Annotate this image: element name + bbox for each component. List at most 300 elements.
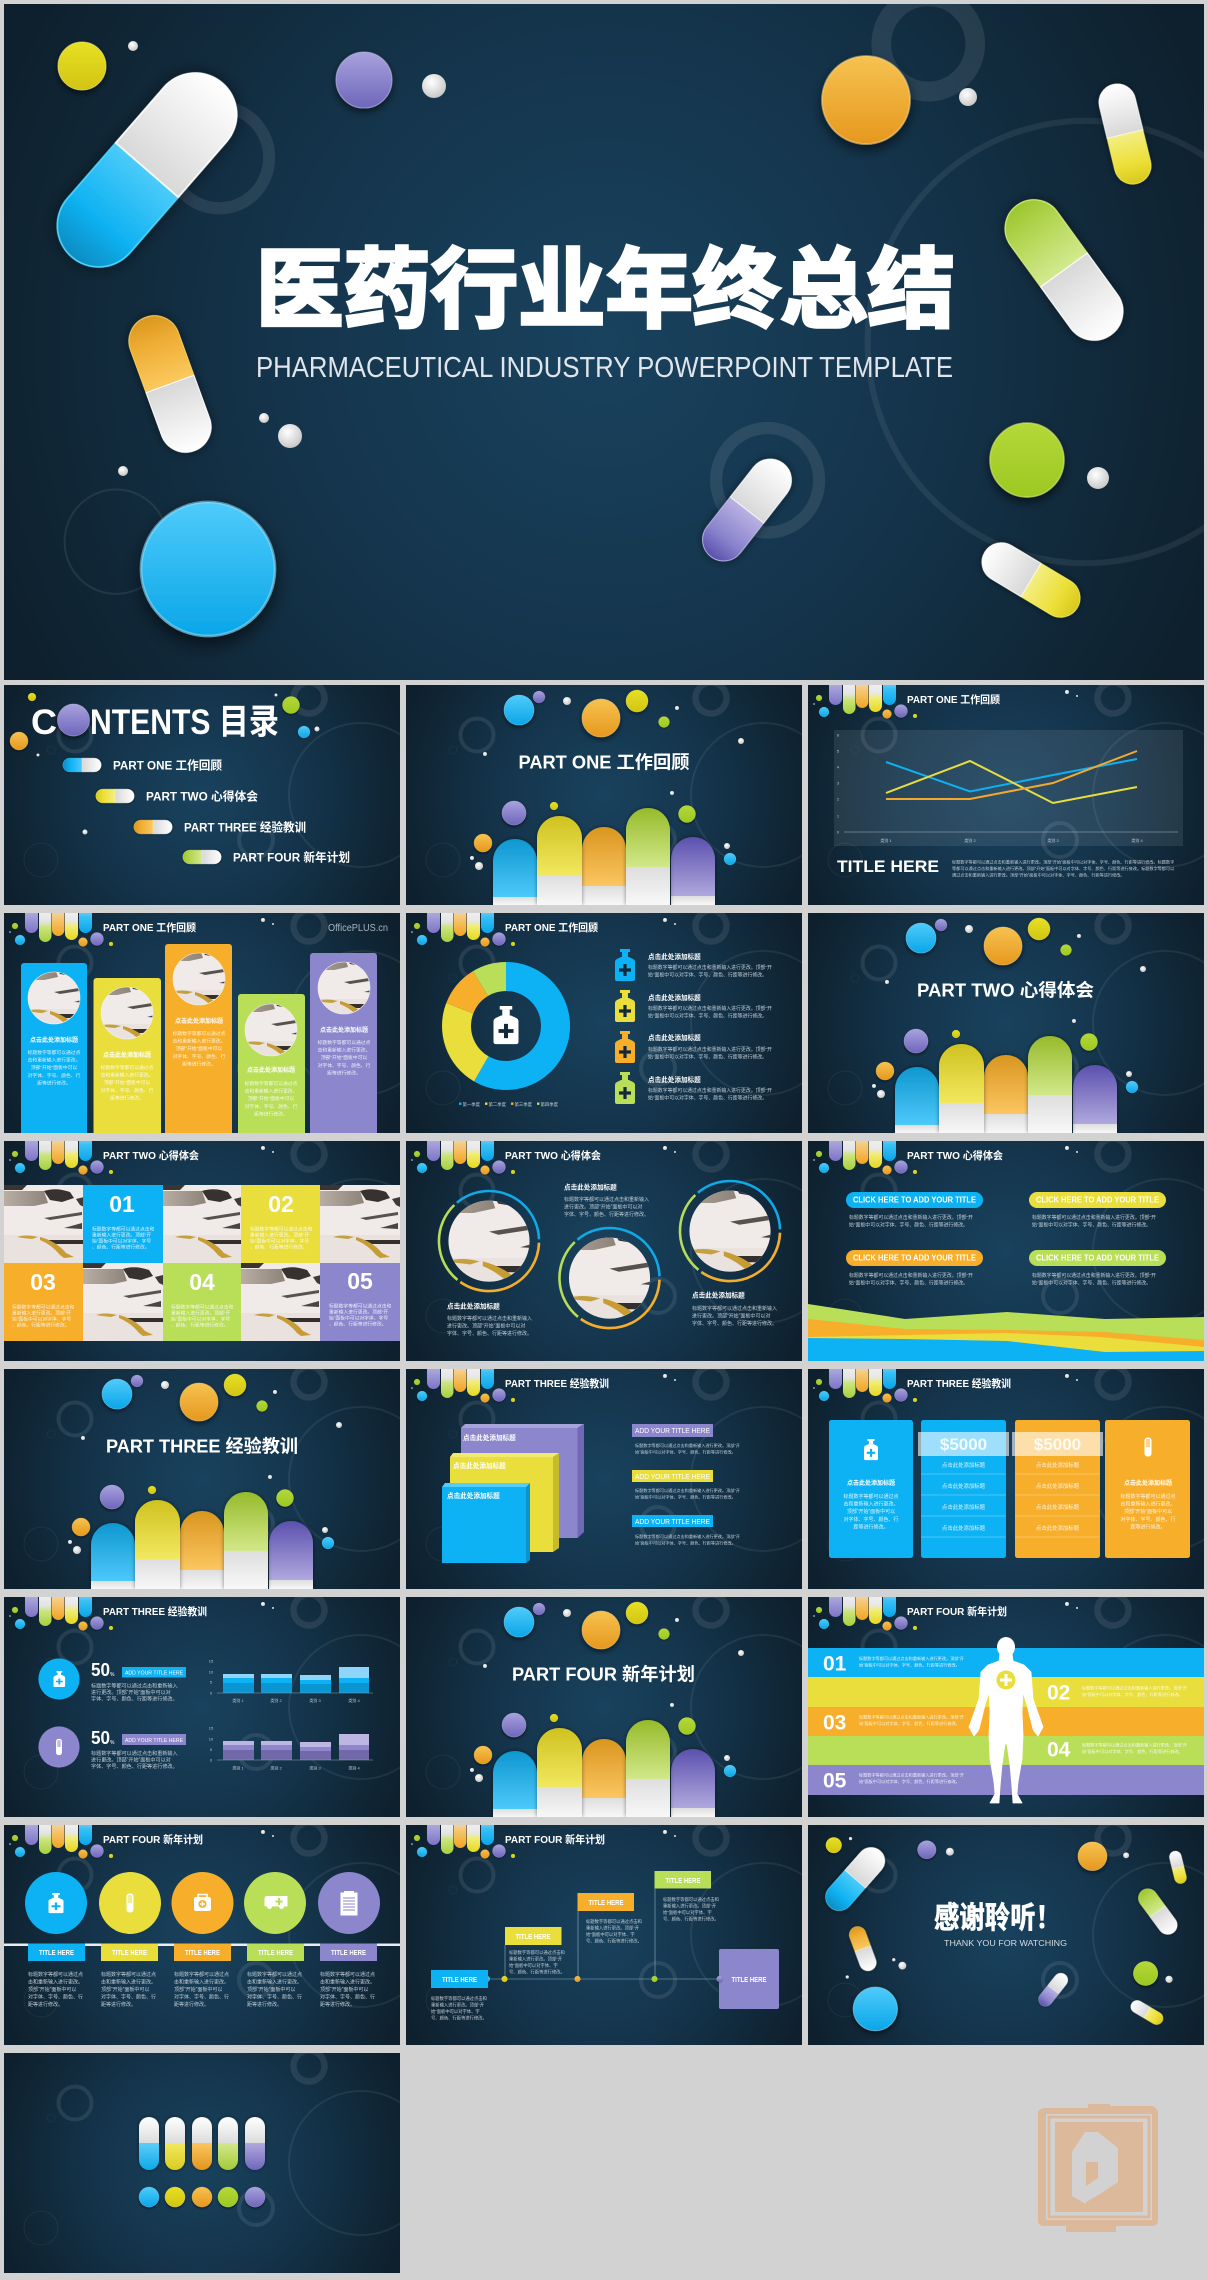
column: clipboard — [318, 1872, 380, 2008]
tile 02: 始”面板中可以对字体、字号 — [250, 1238, 309, 1244]
brand text: OfficePLUS.cn — [328, 923, 388, 934]
tile 02: 、颜色、行距等进行修改。 — [250, 1244, 308, 1250]
tile 05: 05 — [347, 1268, 373, 1294]
item: yellow label — [632, 1470, 740, 1500]
card: green: 顶部“开始”面板中可以 — [248, 1095, 294, 1102]
chart 2: purple stacked bars: 类别 2 — [270, 1764, 282, 1770]
box: blue — [442, 1483, 530, 1563]
text block 1: 点击此处添加标题 — [447, 1302, 500, 1310]
column: medical kit: TITLE HERE — [185, 1948, 220, 1957]
icon: bottle — [494, 1006, 518, 1044]
column: bottle: 标题数字等都可以通过点 — [28, 1971, 83, 1978]
item: blue button: 标题数字等都可以通过点击和重新输入进行更改。顶部“开 — [849, 1214, 973, 1221]
legend: 第二季度 — [488, 1101, 507, 1108]
column: test tube: TITLE HERE — [112, 1948, 147, 1957]
tile 01 — [83, 1185, 163, 1263]
panel: staggered photo cards slide — [4, 913, 400, 1133]
step: blue: 号、颜色、行距等进行修改。 — [431, 2014, 487, 2022]
column: medical kit: 击和重新输入进行更改。 — [174, 1979, 229, 1986]
text block 1 — [447, 1302, 532, 1337]
item: blue label: 标题数字等都可以通过点击和重新输入进行更改。顶部“开 — [635, 1533, 740, 1539]
card: orange info: 标题数字等都可以通过点 — [1120, 1493, 1176, 1500]
card: orange — [159, 940, 239, 1138]
heading: PART FOUR 新年计划 — [103, 1833, 203, 1846]
card: orange: 距等进行修改。 — [182, 1060, 216, 1067]
card: green — [231, 991, 311, 1138]
card: yellow: 对字体、字号、颜色、行 — [101, 1087, 154, 1094]
divider line — [4, 1944, 400, 1946]
item: blue button: CLICK HERE TO ADD YOUR TITLE — [853, 1196, 977, 1204]
card: blue price: $5000 — [940, 1435, 987, 1454]
header decoration — [411, 901, 676, 946]
tile 05 — [320, 1263, 400, 1341]
panel: human body bands slide — [808, 1585, 1208, 1817]
card: blue — [14, 959, 94, 1138]
heading: PART THREE 经验教训 — [505, 1377, 609, 1390]
panel: section divider part two — [808, 910, 1208, 1133]
item: orange button: 始”面板中可以对字体、字号、颜色、行距等进行修改。 — [849, 1280, 968, 1286]
card: blue info: 标题数字等都可以通过点 — [843, 1493, 899, 1500]
card: yellow: 标题数字等都可以通过点 — [101, 1064, 154, 1071]
stat 1: 进行更改。顶部“开始”面板中可以对 — [91, 1689, 171, 1696]
item: green button: CLICK HERE TO ADD YOUR TITLE — [1036, 1254, 1160, 1262]
photo tiles — [4, 1185, 400, 1341]
column: bottle: 对字体、字号、颜色、行 — [28, 1994, 83, 2000]
panel: buttons and waves slide — [808, 1129, 1208, 1361]
heading: PART THREE 经验教训 — [106, 1436, 298, 1456]
stat 1: 标题数字等都可以通过点击和重新输入 — [91, 1682, 178, 1690]
card: green: 对字体、字号、颜色、行 — [245, 1103, 298, 1110]
column: medical kit — [172, 1872, 234, 2008]
text block 1: 字体、字号、颜色、行距等进行修改。 — [447, 1330, 532, 1337]
card: orange price: 点击此处添加标题 — [1036, 1524, 1080, 1532]
illustration: arches and balls — [68, 1374, 342, 1589]
item 2: 始”面板中可以对字体、字号、颜色、行距等进行修改。 — [648, 1013, 767, 1020]
heading: PART ONE 工作回顾 — [505, 921, 598, 934]
step: yellow: 标题数字等都可以通过点击和 — [509, 1949, 565, 1956]
heading: contents: C — [31, 703, 57, 742]
tile 02: 02 — [268, 1191, 294, 1217]
panel: five circles slide — [4, 1813, 433, 2045]
item: blue label — [632, 1515, 740, 1546]
text block 3: 点击此处添加标题 — [692, 1290, 745, 1300]
watermark stamp — [1038, 2104, 1158, 2232]
card: orange: 对字体、字号、颜色、行 — [173, 1053, 226, 1060]
item 4 — [615, 1072, 772, 1104]
tile 04: 、颜色、行距等进行修改。 — [171, 1322, 229, 1328]
box: blue: 点击此处添加标题 — [447, 1491, 500, 1500]
panel: numbered tile grid slide — [4, 1129, 433, 1361]
item: green button: 始”面板中可以对字体、字号、颜色、行距等进行修改。 — [1032, 1280, 1151, 1286]
card: blue info: 距等进行修改。 — [853, 1523, 889, 1530]
item 02: 02 — [1047, 1682, 1070, 1704]
chart 2: purple stacked bars: 类别 1 — [232, 1764, 244, 1770]
item 04: 04 — [1047, 1738, 1071, 1762]
column: test tube: 对字体、字号、颜色、行 — [101, 1994, 156, 2000]
tile 01: 、颜色、行距等进行修改。 — [92, 1244, 150, 1250]
tile 03: 始”面板中可以对字体、字号 — [12, 1316, 71, 1322]
column: clipboard: 击和重新输入进行更改。 — [320, 1979, 375, 1986]
item: orange button — [846, 1250, 983, 1286]
item 03: 始”面板中可以对字体、字号、颜色、行距等进行修改。 — [859, 1720, 960, 1726]
item 03: 标题数字等都可以通过点击和重新输入进行更改。顶部“开 — [859, 1714, 964, 1720]
line chart: 0 — [837, 830, 840, 834]
column: bottle: 距等进行修改。 — [28, 2001, 63, 2008]
chart 2: purple stacked bars: 5 — [210, 1747, 213, 1752]
item 4: 始”面板中可以对字体、字号、颜色、行距等进行修改。 — [648, 1095, 767, 1102]
card: blue: 点击此处添加标题 — [30, 1036, 78, 1044]
panel: pricing cards slide — [808, 1357, 1208, 1589]
tile 03: 、颜色、行距等进行修改。 — [12, 1322, 70, 1328]
wave bands — [808, 1304, 1204, 1361]
body text: 等都可以通过点击和重新输入进行更改。顶部“开始”面板中可以对字体、字号、颜色、行距等进行修改。标题数字等都可以 — [952, 865, 1174, 871]
step: orange: 始”面板中可以对字体、字 — [586, 1931, 635, 1938]
step: green: 重新输入进行更改。顶部“开 — [663, 1902, 717, 1910]
chart 2: purple stacked bars: 类别 4 — [348, 1764, 360, 1770]
item 02: 标题数字等都可以通过点击和重新输入进行更改。顶部“开 — [1082, 1684, 1187, 1690]
chart 1: blue stacked bars: 15 — [209, 1658, 214, 1664]
card: blue info: 顶部“开始”面板中可以 — [847, 1508, 895, 1515]
contents item 2: PART TWO 心得体会 — [146, 788, 258, 804]
stat 1: % — [110, 1672, 115, 1678]
item 4: 标题数字等都可以通过点击和重新输入进行更改。顶部“开 — [648, 1087, 772, 1094]
step: yellow — [505, 1927, 565, 1976]
header decoration — [813, 1585, 1078, 1630]
text block 2: 进行更改。顶部“开始”面板中可以对 — [564, 1204, 642, 1210]
decorative balls — [10, 693, 320, 834]
chart 1: blue stacked bars: 0 — [210, 1690, 213, 1696]
panel: section divider part four — [406, 1594, 835, 1817]
chart 1: blue stacked bars: 类别 2 — [270, 1697, 282, 1703]
step: orange: 号、颜色、行距等进行修改。 — [586, 1938, 642, 1944]
panel: stacked bars slide — [4, 1585, 433, 1817]
card: orange: 顶部“开始”面板中可以 — [176, 1045, 222, 1052]
header decoration — [813, 1129, 1078, 1174]
item 1: 始”面板中可以对字体、字号、颜色、行距等进行修改。 — [648, 972, 767, 979]
legend: 第三季度 — [514, 1101, 533, 1108]
item: yellow button: 标题数字等都可以通过点击和重新输入进行更改。顶部“开 — [1032, 1214, 1156, 1221]
item: blue button: 始”面板中可以对字体、字号、颜色、行距等进行修改。 — [849, 1222, 968, 1228]
step: orange: 标题数字等都可以通过点击和 — [586, 1918, 642, 1925]
step: green: 号、颜色、行距等进行修改。 — [663, 1916, 719, 1922]
panel: donut chart slide — [406, 901, 835, 1133]
line chart: 1 — [837, 814, 840, 818]
column: ambulance: 顶部“开始”面板中可以 — [247, 1986, 295, 1993]
stat 2 — [38, 1726, 186, 1770]
card: blue: 距等进行修改。 — [37, 1079, 71, 1086]
text block 3: 字体、字号、颜色、行距等进行修改。 — [692, 1320, 777, 1327]
column: ambulance — [244, 1872, 306, 2008]
illustration: floating pills and tablets — [820, 1837, 1188, 2031]
heading: PART TWO 心得体会 — [505, 1149, 601, 1162]
contents item 4 — [183, 850, 350, 864]
heading: contents: NTENTS 目录 — [90, 703, 279, 742]
card: purple: 顶部“开始”面板中可以 — [321, 1054, 367, 1061]
palette balls — [139, 2187, 265, 2207]
tile 02 — [241, 1185, 320, 1263]
tile 05: 始”面板中可以对字体、字号 — [329, 1314, 388, 1322]
item: purple label: ADD YOUR TITLE HERE — [635, 1426, 710, 1435]
text block 3 — [692, 1290, 777, 1327]
card: yellow: 顶部“开始”面板中可以 — [104, 1079, 150, 1086]
card: orange info: 点击此处添加标题 — [1124, 1479, 1172, 1487]
line chart: 4 — [837, 764, 840, 770]
timeline connectors — [488, 1888, 721, 1979]
step: orange — [578, 1893, 642, 1944]
line chart: 类别 4 — [1131, 837, 1143, 843]
header decoration — [9, 1585, 274, 1630]
chart 2: purple stacked bars — [209, 1726, 373, 1770]
colour bands — [808, 1648, 1204, 1795]
heading: PART ONE 工作回顾 — [103, 921, 196, 934]
column: test tube: 标题数字等都可以通过点 — [101, 1971, 156, 1978]
stat 1: ADD YOUR TITLE HERE — [125, 1670, 183, 1676]
column: ambulance: 标题数字等都可以通过点 — [247, 1971, 302, 1978]
item: yellow label: 标题数字等都可以通过点击和重新输入进行更改。顶部“开 — [635, 1487, 740, 1493]
stat 2: % — [110, 1740, 115, 1746]
card: orange info: 顶部“开始”面板中可以 — [1124, 1508, 1172, 1515]
panel: ring photos slide — [406, 1129, 835, 1361]
item 3: 始”面板中可以对字体、字号、颜色、行距等进行修改。 — [648, 1054, 767, 1061]
item: green button — [1029, 1250, 1166, 1286]
item 05: 05 — [823, 1770, 847, 1792]
legend: 第四季度 — [540, 1101, 559, 1108]
item: yellow button: CLICK HERE TO ADD YOUR TITLE — [1036, 1196, 1160, 1204]
item: yellow label: ADD YOUR TITLE HERE — [635, 1472, 710, 1481]
illustration: arches and balls — [470, 690, 744, 905]
card: blue info: 击和重新输入进行更改。 — [843, 1501, 899, 1508]
step: purple box: TITLE HERE — [732, 1975, 767, 1984]
chart 2: purple stacked bars: 类别 3 — [309, 1764, 321, 1770]
card: orange info: 距等进行修改。 — [1130, 1523, 1166, 1530]
tile 01: 标题数字等都可以通过点击和 — [92, 1226, 155, 1232]
column: medical kit: 对字体、字号、颜色、行 — [174, 1994, 229, 2000]
column: medical kit: 标题数字等都可以通过点 — [174, 1971, 229, 1978]
tile 03: 重新输入进行更改。顶部“开 — [12, 1310, 71, 1316]
tile 05: 、颜色、行距等进行修改。 — [329, 1320, 387, 1328]
card: green: 点击此处添加标题 — [247, 1066, 295, 1074]
card: green: 标题数字等都可以通过点 — [245, 1080, 298, 1087]
card: blue price: 点击此处添加标题 — [942, 1461, 986, 1469]
item 03: 03 — [823, 1712, 846, 1734]
column: bottle: TITLE HERE — [39, 1948, 74, 1957]
heading: PART THREE 经验教训 — [103, 1605, 207, 1618]
tile 04: 标题数字等都可以通过点击和 — [171, 1304, 234, 1310]
card: green: 距等进行修改。 — [254, 1110, 288, 1117]
step: purple box — [716, 1949, 779, 2009]
column: test tube: 顶部“开始”面板中可以 — [101, 1986, 149, 1993]
donut chart — [442, 962, 570, 1090]
step: orange: TITLE HERE — [588, 1898, 624, 1907]
card: purple: 标题数字等都可以通过点 — [318, 1039, 371, 1046]
column: ambulance: 对字体、字号、颜色、行 — [247, 1994, 302, 2000]
item 01: 标题数字等都可以通过点击和重新输入进行更改。顶部“开 — [859, 1655, 964, 1661]
header decoration — [9, 1813, 274, 1858]
subtitle: PHARMACEUTICAL INDUSTRY POWERPOINT TEMPLATE — [256, 352, 953, 384]
chart 2: purple stacked bars: 15 — [209, 1726, 214, 1730]
step: green: TITLE HERE — [666, 1876, 701, 1885]
card: purple: 击和重新输入进行更改。 — [318, 1047, 370, 1054]
text block 2: 标题数字等都可以通过点击和重新输入 — [564, 1196, 649, 1203]
tile 02: 标题数字等都可以通过点击和 — [250, 1226, 313, 1232]
column: test tube: 击和重新输入进行更改。 — [101, 1979, 156, 1986]
line chart: 5 — [837, 748, 840, 754]
illustration: arches and balls — [872, 918, 1146, 1133]
text block 1: 标题数字等都可以通过点击和重新输入 — [447, 1315, 532, 1322]
tile 04 — [163, 1263, 241, 1341]
item 04: 标题数字等都可以通过点击和重新输入进行更改。顶部“开 — [1082, 1742, 1187, 1748]
header decoration — [813, 1357, 1078, 1402]
title here: TITLE HERE — [837, 858, 939, 876]
item: green button: 标题数字等都可以通过点击和重新输入进行更改。顶部“开 — [1032, 1272, 1156, 1279]
chart 1: blue stacked bars: 10 — [209, 1670, 214, 1674]
panel: closing palette slide — [4, 2050, 433, 2273]
tile 04: 重新输入进行更改。顶部“开 — [171, 1310, 230, 1316]
stat 1: 字体、字号、颜色、行距等进行修改。 — [91, 1696, 178, 1702]
contents item 1 — [63, 758, 222, 772]
line chart: 类别 3 — [1047, 837, 1059, 843]
card: purple: 点击此处添加标题 — [320, 1026, 368, 1034]
item 3: 标题数字等都可以通过点击和重新输入进行更改。顶部“开 — [648, 1046, 772, 1053]
item 2: 点击此处添加标题 — [648, 993, 701, 1002]
step: yellow: 始”面板中可以对字体、字 — [509, 1962, 558, 1969]
heading: PART FOUR 新年计划 — [512, 1664, 695, 1684]
item 1: 点击此处添加标题 — [648, 952, 701, 961]
line chart: 6 — [837, 732, 840, 738]
column: ambulance: TITLE HERE — [258, 1948, 293, 1957]
header decoration — [9, 913, 274, 948]
card: blue: 标题数字等都可以通过点 — [28, 1049, 81, 1056]
column: clipboard: 顶部“开始”面板中可以 — [320, 1986, 368, 1993]
item: blue label: ADD YOUR TITLE HERE — [635, 1517, 710, 1526]
item 4: 点击此处添加标题 — [648, 1075, 701, 1084]
heading: PART TWO 心得体会 — [103, 1149, 199, 1162]
panel: stepped timeline slide — [406, 1813, 835, 2045]
item 05: 标题数字等都可以通过点击和重新输入进行更改。顶部“开 — [859, 1772, 964, 1778]
column: test tube — [99, 1872, 161, 2008]
tile 02: 重新输入进行更改。顶部“开 — [250, 1232, 309, 1238]
card: yellow: 点击此处添加标题 — [103, 1051, 151, 1059]
card: yellow: 距等进行修改。 — [110, 1094, 144, 1101]
item: purple label: 标题数字等都可以通过点击和重新输入进行更改。顶部“开 — [635, 1442, 740, 1448]
contents item 4: PART FOUR 新年计划 — [233, 850, 350, 864]
tile 03: 标题数字等都可以通过点击和 — [12, 1304, 75, 1310]
column: test tube: 距等进行修改。 — [101, 2001, 136, 2008]
panel: cover slide — [4, 0, 1208, 680]
body text: 标题数字等都可以通过点击和重新输入进行更改。顶部“开始”面板中可以对字体、字号、颜色、行距等进行修改。标题数字 — [952, 858, 1174, 864]
box: purple: 点击此处添加标题 — [463, 1433, 516, 1442]
item 02 — [1047, 1682, 1187, 1704]
stat 2: 进行更改。顶部“开始”面板中可以对 — [91, 1756, 171, 1764]
column: clipboard: TITLE HERE — [331, 1948, 366, 1957]
card: blue price: 点击此处添加标题 — [942, 1482, 986, 1490]
tile 03: 03 — [30, 1269, 56, 1295]
item 2: 标题数字等都可以通过点击和重新输入进行更改。顶部“开 — [648, 1005, 772, 1012]
capsule: orange — [192, 2117, 212, 2170]
header decoration — [813, 685, 1078, 720]
heading: PART TWO 心得体会 — [907, 1149, 1003, 1162]
tile 05: 重新输入进行更改。顶部“开 — [329, 1308, 388, 1316]
legend — [459, 1101, 559, 1108]
item 2 — [615, 990, 772, 1022]
panel: stacked boxes slide — [406, 1357, 835, 1589]
column: medical kit: 顶部“开始”面板中可以 — [174, 1986, 222, 1993]
card: blue: 击和重新输入进行更改。 — [28, 1057, 80, 1064]
item: yellow label: 始”面板中可以对字体、字号、颜色、行距等进行修改。 — [635, 1494, 736, 1500]
line chart: 类别 2 — [964, 837, 976, 843]
step: green: 标题数字等都可以通过点击和 — [663, 1896, 719, 1903]
item: blue button — [846, 1192, 983, 1228]
column: clipboard: 距等进行修改。 — [320, 2001, 355, 2008]
panel: section divider part three — [4, 1366, 433, 1589]
column: bottle — [25, 1872, 87, 2008]
step: blue: 重新输入进行更改。顶部“开 — [431, 2002, 485, 2008]
tile 04: 04 — [189, 1269, 215, 1295]
card: orange info: 击和重新输入进行更改。 — [1120, 1501, 1176, 1508]
step: yellow: 重新输入进行更改。顶部“开 — [509, 1956, 563, 1962]
header decoration — [411, 1129, 676, 1174]
item 3: 点击此处添加标题 — [648, 1033, 701, 1042]
chart 1: blue stacked bars: 类别 1 — [232, 1697, 244, 1703]
item 01 — [823, 1652, 964, 1676]
item 01: 始”面板中可以对字体、字号、颜色、行距等进行修改。 — [859, 1662, 960, 1668]
card: blue price: 点击此处添加标题 — [942, 1524, 986, 1532]
column: bottle: 击和重新输入进行更改。 — [28, 1979, 83, 1986]
stat 2: 50 — [91, 1728, 110, 1748]
header decoration — [411, 1357, 676, 1402]
card: blue info: 点击此处添加标题 — [847, 1479, 895, 1487]
header decoration — [411, 1813, 676, 1858]
column: clipboard: 对字体、字号、颜色、行 — [320, 1994, 375, 2000]
column: bottle: 顶部“开始”面板中可以 — [28, 1986, 76, 1993]
contents item 3: PART THREE 经验教训 — [184, 820, 306, 834]
contents item 1: PART ONE 工作回顾 — [113, 758, 222, 772]
panel: thanks slide — [808, 1822, 1208, 2045]
capsule: purple — [245, 2117, 265, 2170]
capsule: green — [218, 2117, 238, 2170]
item: yellow button — [1029, 1192, 1166, 1228]
capsule: blue — [139, 2117, 159, 2170]
chart 2: purple stacked bars: 0 — [210, 1758, 213, 1762]
item 04 — [1047, 1738, 1187, 1762]
heading: contents: O — [59, 703, 88, 742]
heading: PART THREE 经验教训 — [907, 1377, 1011, 1390]
heading: PART FOUR 新年计划 — [907, 1605, 1007, 1618]
stat 1: 50 — [91, 1660, 110, 1680]
card: yellow — [87, 974, 167, 1138]
item 05 — [823, 1770, 964, 1792]
legend: 第一季度 — [462, 1101, 481, 1108]
tile 01: 始”面板中可以对字体、字号 — [92, 1238, 151, 1244]
box: yellow — [450, 1453, 559, 1552]
contents item 3 — [134, 820, 306, 834]
step: green: 始”面板中可以对字体、字 — [663, 1909, 712, 1916]
step: blue: 始”面板中可以对字体、字 — [431, 2008, 480, 2015]
item 1: 标题数字等都可以通过点击和重新输入进行更改。顶部“开 — [648, 964, 772, 971]
card: blue: 对字体、字号、颜色、行 — [28, 1072, 81, 1079]
card: orange info: 对字体、字号、颜色、行 — [1120, 1516, 1176, 1523]
ring photo 3 — [668, 1170, 792, 1292]
item: yellow button: 始”面板中可以对字体、字号、颜色、行距等进行修改。 — [1032, 1222, 1151, 1228]
step: yellow: 号、颜色、行距等进行修改。 — [509, 1968, 565, 1976]
item 03 — [823, 1712, 964, 1734]
card: blue info: 对字体、字号、颜色、行 — [843, 1516, 899, 1523]
card: orange price: 点击此处添加标题 — [1036, 1461, 1080, 1469]
heading: contents — [32, 706, 278, 737]
icon: human silhouette — [969, 1637, 1043, 1803]
stat 2: ADD YOUR TITLE HERE — [125, 1738, 183, 1744]
card: green: 击和重新输入进行更改。 — [245, 1088, 297, 1095]
